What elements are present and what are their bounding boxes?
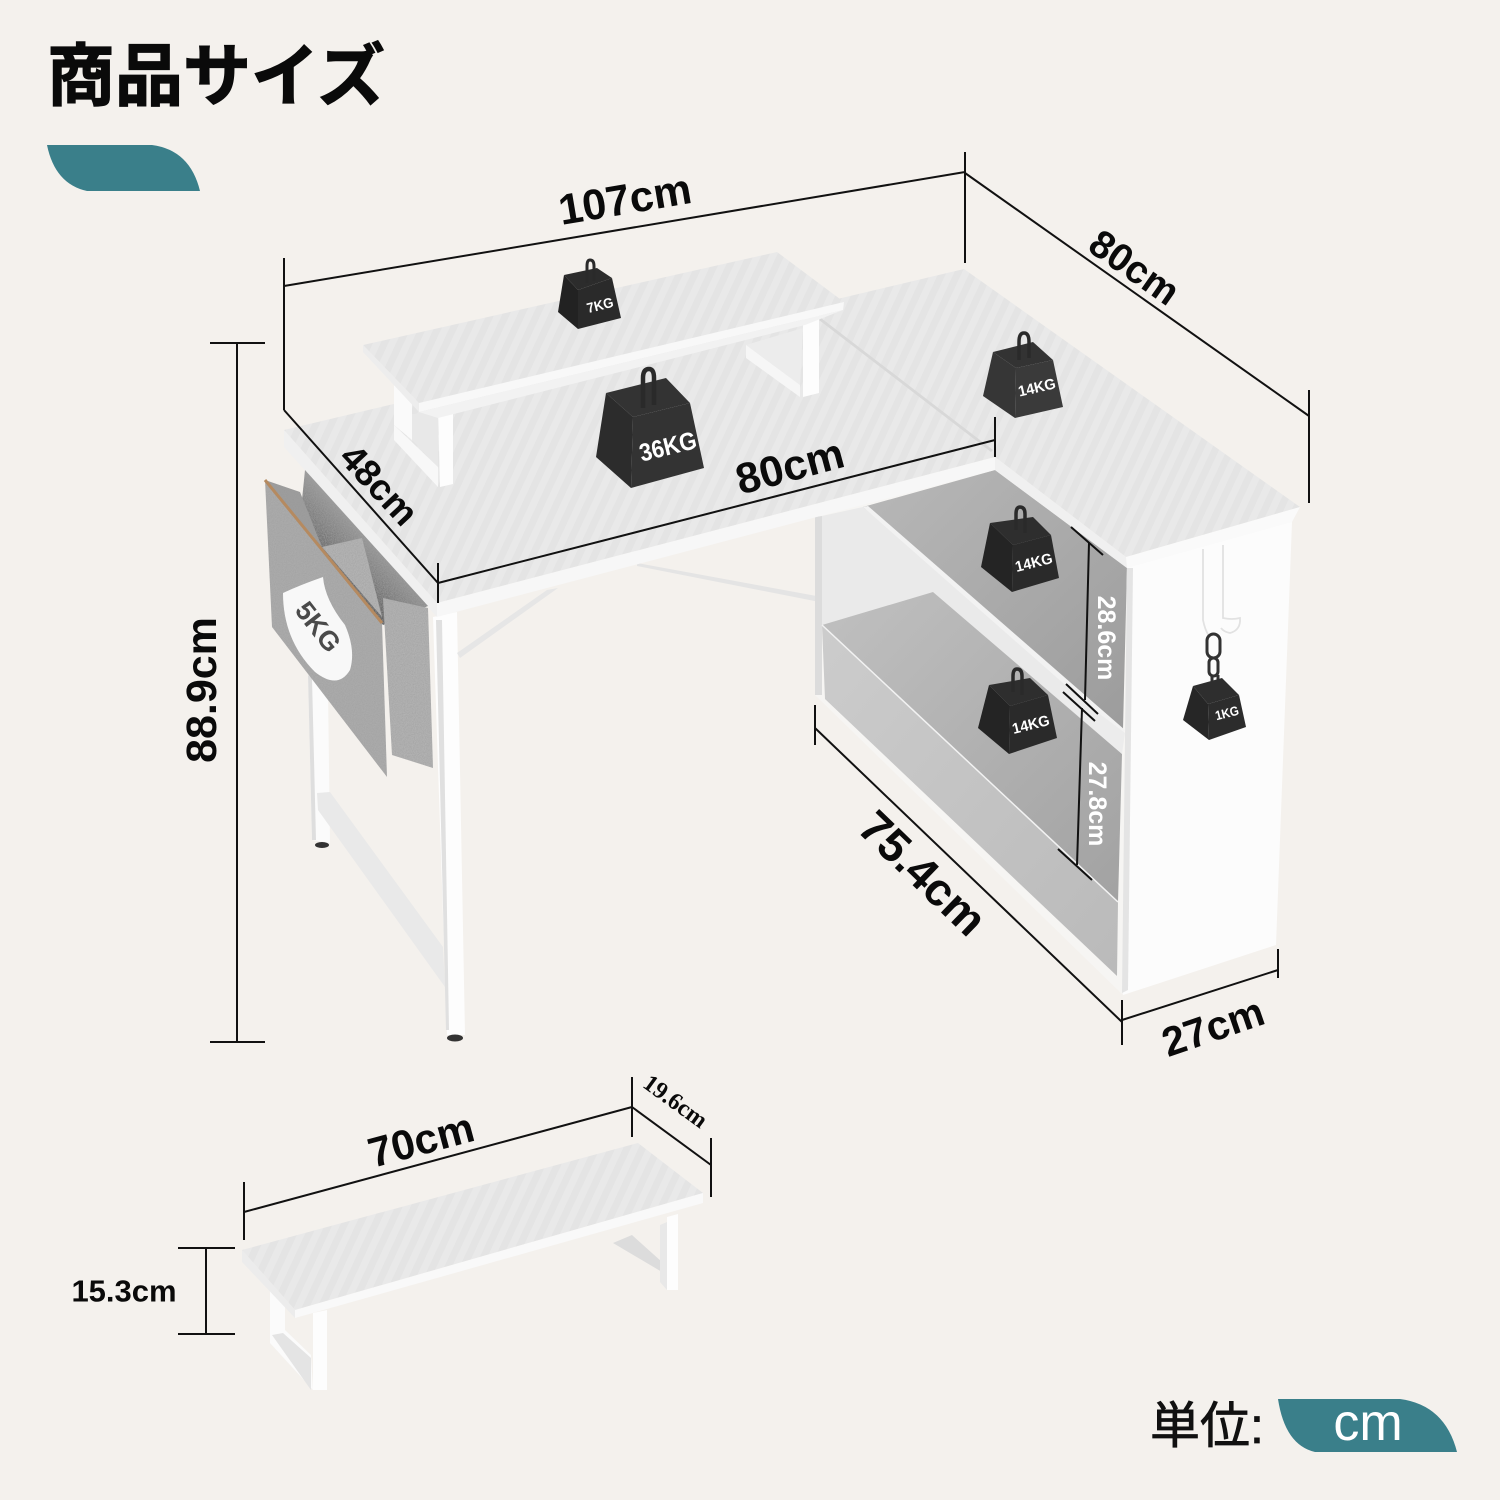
monitor stand separate view	[242, 1143, 703, 1390]
stand top surface	[242, 1143, 703, 1310]
dimension: 48cm: 48cm	[332, 436, 426, 534]
dimension: 28.6cm shelf height	[1066, 527, 1120, 714]
weight: 14KG upper shelf	[981, 507, 1059, 592]
dimension: 27.8cm shelf height: 27.8cm	[1083, 762, 1111, 846]
desk seam	[819, 318, 993, 452]
weight: 36KG	[596, 369, 704, 488]
weight: 1KG with chain: 1KG	[1214, 703, 1240, 723]
unit badge	[1278, 1394, 1457, 1452]
dimension: 15.3cm: 15.3cm	[71, 1274, 177, 1308]
stand legs	[270, 1214, 678, 1390]
dimension: 19.6cm	[632, 1070, 712, 1197]
weight: 14KG desk corner	[983, 333, 1063, 418]
stand top edges	[242, 1193, 703, 1318]
5KG label badge	[283, 577, 352, 681]
dimension: 27.8cm shelf height	[1058, 692, 1111, 880]
dimension: 27cm: 27cm	[1156, 988, 1270, 1066]
L-shaped desk	[284, 269, 1300, 1042]
dimension: 75.4cm: 75.4cm	[849, 800, 997, 946]
weight: 36KG: 36KG	[636, 426, 700, 468]
5KG label badge: 5KG	[289, 596, 347, 658]
weight: 7KG: 7KG	[585, 294, 615, 316]
dimension: 19.6cm: 19.6cm	[638, 1070, 712, 1134]
monitor stand on desk	[363, 252, 844, 487]
dimension: 70cm	[244, 1077, 632, 1240]
weight: 14KG upper shelf: 14KG	[1014, 550, 1054, 576]
unit badge: cm	[1333, 1394, 1403, 1452]
desk top edges	[284, 430, 1300, 617]
dimension: 80cm depth	[965, 173, 1309, 503]
title accent shape	[47, 145, 200, 191]
weight: 14KG lower shelf: 14KG	[1011, 712, 1051, 738]
dimension: 48cm	[284, 410, 438, 603]
wall hooks	[1203, 545, 1240, 636]
weight: 14KG lower shelf	[978, 669, 1057, 754]
dimension: 75.4cm	[815, 705, 1122, 1045]
left frame legs	[308, 612, 465, 1042]
title: 商品サイズ	[47, 39, 385, 115]
cabinet side panel	[1122, 522, 1292, 995]
dimension: 70cm: 70cm	[363, 1103, 479, 1177]
side storage bag	[265, 470, 433, 777]
dimension: 88.9cm height: 88.9cm	[178, 617, 226, 763]
storage cabinet interior	[815, 470, 1127, 995]
dimension: 15.3cm	[71, 1248, 235, 1334]
dimension: 80cm front	[438, 417, 995, 583]
unit label: 単位:	[1150, 1398, 1264, 1454]
dimension: 107cm: 107cm	[555, 165, 695, 235]
weight: 7KG	[558, 260, 621, 329]
desk top surface	[284, 269, 1300, 603]
dimension: 88.9cm height	[178, 343, 265, 1042]
cross braces	[457, 563, 860, 658]
dimension: 107cm	[284, 152, 965, 410]
dimension: 28.6cm shelf height: 28.6cm	[1092, 596, 1120, 680]
weight: 1KG with chain	[1183, 634, 1246, 740]
weight: 14KG desk corner: 14KG	[1017, 375, 1057, 401]
dimension: 80cm depth: 80cm	[1081, 222, 1187, 314]
dimension: 27cm	[1122, 949, 1278, 1066]
dimension: 80cm front: 80cm	[731, 430, 849, 504]
